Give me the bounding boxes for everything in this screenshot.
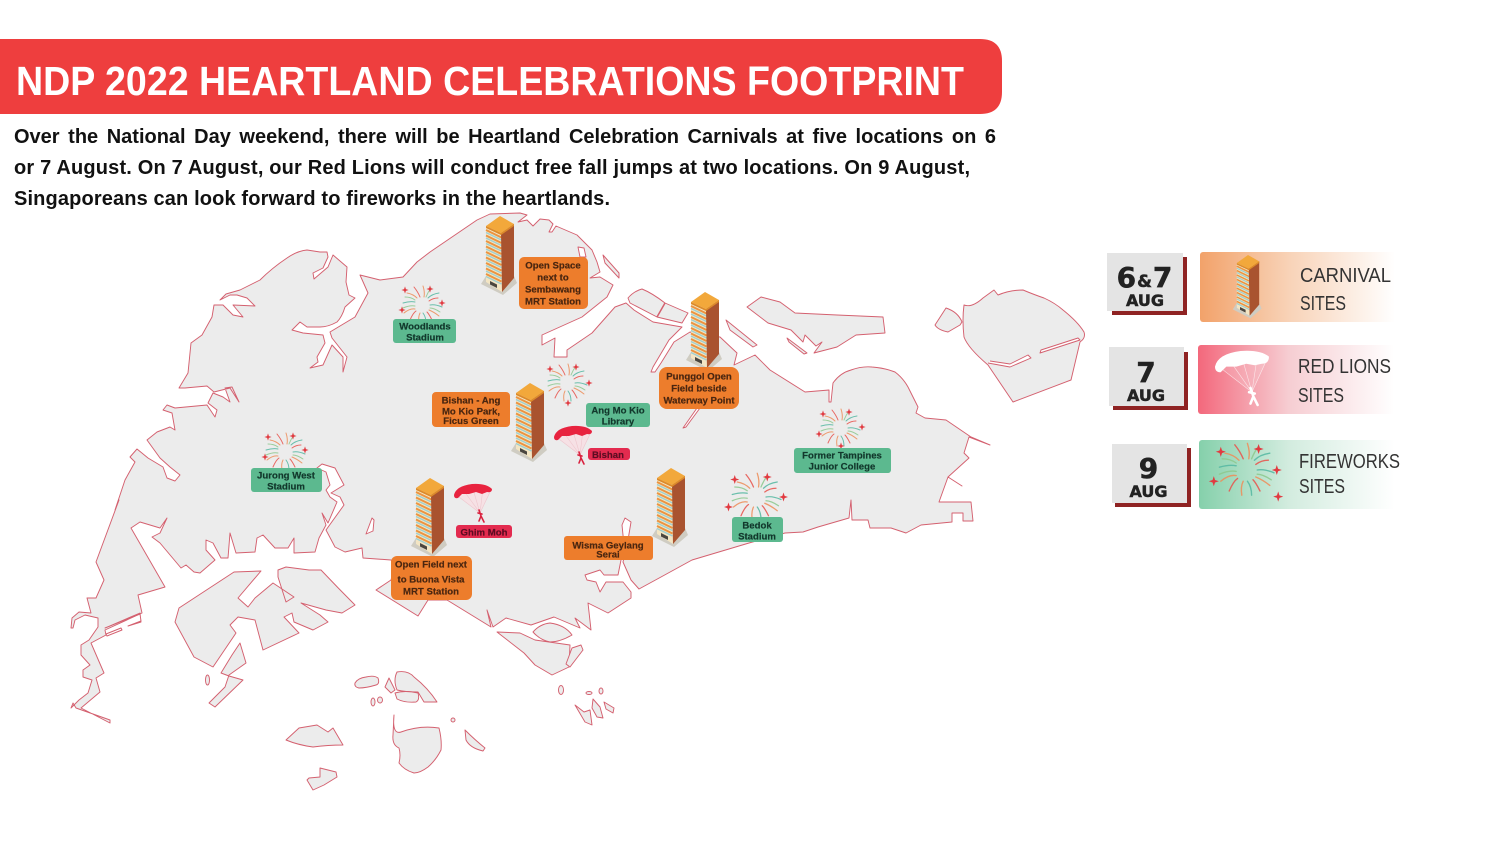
- label: Sembawang: Sembawang: [525, 284, 581, 296]
- gradient strip: [1198, 345, 1500, 414]
- label: Woodlands Stadium: Woodlands: [399, 322, 451, 332]
- fireworks site: Tampines: [794, 408, 891, 473]
- title text: NDP 2022 HEARTLAND CELEBRATIONS FOOTPRINT: [16, 58, 964, 104]
- Sembawang strip: [603, 255, 619, 278]
- legend: [1107, 252, 1500, 509]
- label: Sembawang: MRT Station: [525, 296, 581, 308]
- date card: 9 Aug: [1112, 444, 1191, 507]
- label: Buona Vista: to Buona Vista: [398, 574, 465, 586]
- date card: 6 and 7 Aug: AUG: [1126, 291, 1164, 310]
- label: Bedok Stadium: Bedok: [742, 520, 772, 532]
- small islets: [206, 672, 614, 790]
- icon: white parachute: [1215, 351, 1269, 405]
- gradient strip: [1199, 440, 1500, 509]
- label: Punggol: [659, 367, 739, 409]
- label: Ghim Moh: Ghim Moh: [461, 528, 508, 538]
- intro paragraph: [14, 126, 996, 210]
- icon: building: [511, 383, 547, 462]
- label: Punggol: Waterway Point: [663, 396, 735, 406]
- label: Jurong West Stadium: Stadium: [267, 482, 305, 492]
- intro paragraph: or 7 August. On 7 August, our Red Lions will conduct free fall jumps at two locations. On 9 August,: [14, 157, 970, 179]
- date card: 7 Aug: AUG: [1127, 386, 1165, 405]
- label: Bishan: Bishan: [592, 450, 624, 461]
- label: Buona Vista: Open Field next: [395, 560, 468, 570]
- label: Bishan Ang Mo Kio Park: Mo Kio Park,: [442, 406, 500, 418]
- Coney Island: [628, 289, 688, 323]
- legend row: carnival: [1107, 252, 1500, 322]
- label: Ang Mo Kio Library: Library: [602, 416, 635, 428]
- label: Jurong West Stadium: Jurong West: [257, 470, 316, 482]
- label: Former Tampines Junior College: Former Tampines: [802, 450, 882, 462]
- label: Woodlands Stadium: Stadium: [406, 332, 444, 344]
- creeks: [105, 247, 700, 636]
- Red Lions site: Bishan: [554, 426, 630, 464]
- icon: building: [686, 292, 722, 371]
- Bukom island: [209, 643, 246, 707]
- icon: fireworks: [1209, 443, 1283, 502]
- icon: parachute: [554, 426, 592, 464]
- fireworks site: Jurong West: [251, 432, 322, 492]
- carnival site: Punggol: [659, 292, 739, 409]
- label: Bishan Ang Mo Kio Park: [432, 392, 510, 427]
- label: Woodlands Stadium: [393, 319, 456, 344]
- label: Punggol: Field beside: [671, 384, 727, 394]
- label: Bishan Ang Mo Kio Park: Bishan - Ang: [442, 396, 501, 406]
- label: Ang Mo Kio Library: [586, 403, 650, 428]
- Pulau Sajahat: [935, 308, 962, 332]
- date card: 7 Aug: [1109, 347, 1188, 410]
- small eastern Sentosa islet: [566, 645, 583, 667]
- label: Former Tampines Junior College: Junior College: [809, 462, 875, 472]
- Pulau Tekong: [963, 290, 1084, 402]
- carnival site: Bishan: [432, 383, 547, 462]
- fireworks site: Bedok: [724, 472, 788, 542]
- Coney divider: [657, 303, 665, 317]
- label: SITES: [1298, 385, 1344, 407]
- title banner: [0, 39, 1002, 114]
- Sentosa: [497, 632, 570, 675]
- label: RED LIONS: [1298, 356, 1391, 378]
- label: Punggol: Punggol Open: [666, 372, 732, 382]
- label: Bedok Stadium: Stadium: [738, 532, 776, 542]
- label: Wisma Geylang Serai: Wisma Geylang: [572, 540, 644, 552]
- icon: building: [411, 478, 447, 557]
- icon: fireworks: [398, 285, 446, 323]
- label: Wisma Geylang Serai: [564, 536, 653, 560]
- label: Sembawang: [519, 257, 588, 309]
- icon: fireworks: [546, 363, 593, 407]
- label: Jurong West Stadium: [251, 468, 322, 492]
- map of Singapore: [71, 213, 1084, 790]
- icon: fireworks: [815, 408, 866, 450]
- fireworks site: Ang Mo Kio: [546, 363, 650, 428]
- carnival site: Sembawang: [481, 216, 588, 309]
- date card: 7 Aug: 7: [1136, 356, 1156, 389]
- date card: 9 Aug: AUG: [1129, 482, 1168, 501]
- label: Former Tampines Junior College: [794, 448, 891, 473]
- icon: building: [481, 216, 517, 295]
- Ubin strip: [787, 338, 807, 354]
- label: Buona Vista: MRT Station: [403, 586, 459, 598]
- Pulau Ubin: [747, 297, 885, 353]
- label: Bishan Ang Mo Kio Park: Ficus Green: [443, 416, 499, 427]
- label: Sembawang: next to: [537, 272, 569, 284]
- Pulau Punggol strip: [726, 320, 757, 347]
- label: [1299, 451, 1400, 498]
- legend row: Red Lions: [1109, 345, 1500, 414]
- icon: building: [652, 468, 688, 547]
- label: FIREWORKS: [1299, 451, 1400, 473]
- carnival site: Buona Vista: [391, 478, 472, 600]
- carnival site: Geylang Serai: [564, 468, 688, 560]
- Jurong Island: [175, 567, 355, 667]
- label: SITES: [1300, 293, 1346, 315]
- label: SITES: [1299, 476, 1345, 498]
- label: [1298, 356, 1391, 407]
- date card: 6 and 7 Aug: [1107, 253, 1187, 315]
- Tekong creek: [988, 338, 1080, 367]
- Brani: [533, 623, 572, 642]
- label: Bedok Stadium: [732, 517, 783, 542]
- icon: building: [1233, 255, 1262, 318]
- date card: 9 Aug: 9: [1139, 452, 1158, 485]
- label: Wisma Geylang Serai: Serai: [596, 550, 620, 560]
- legend row: fireworks: [1112, 440, 1500, 509]
- label: [1300, 265, 1391, 315]
- fireworks site: Woodlands: [393, 285, 456, 344]
- gradient strip: [1200, 252, 1500, 322]
- intro paragraph: Over the National Day weekend, there will be Heartland Celebration Carnivals at five locations on 6: [14, 126, 996, 148]
- main island: [71, 213, 990, 723]
- icon: fireworks: [261, 432, 309, 470]
- intro paragraph: Singaporeans can look forward to fireworks in the heartlands.: [14, 188, 610, 210]
- Red Lions site: Ghim Moh: [454, 484, 512, 538]
- label: Buona Vista: [391, 556, 472, 600]
- label: Ang Mo Kio Library: Ang Mo Kio: [591, 406, 645, 416]
- icon: parachute: [454, 484, 492, 522]
- icon: fireworks: [724, 472, 788, 520]
- label: CARNIVAL: [1300, 265, 1391, 287]
- label: Sembawang: Open Space: [525, 260, 581, 272]
- date card: 6 and 7 Aug: 6&7: [1117, 261, 1172, 294]
